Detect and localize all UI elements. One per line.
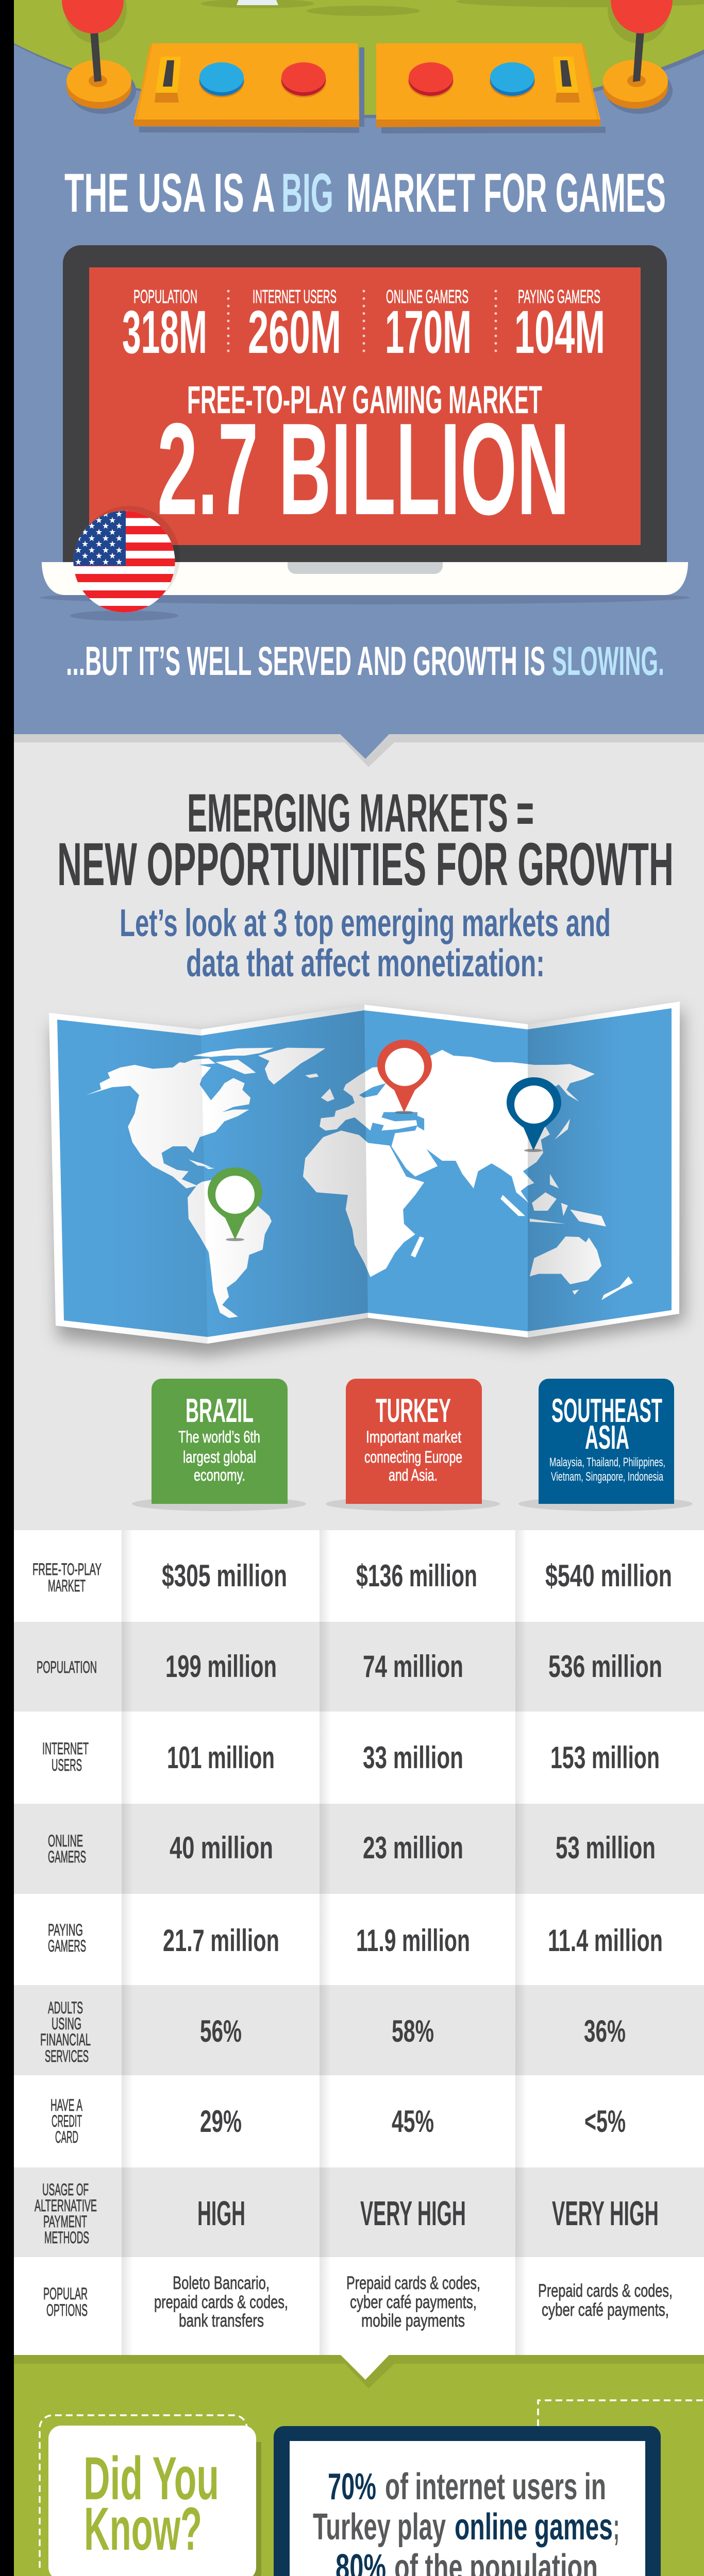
card: Turkey: Important market bbox=[366, 1428, 461, 1446]
icon: left button panel bbox=[134, 43, 364, 133]
row: popular options: bank transfers bbox=[179, 2311, 264, 2331]
illustration: desktop monitor with Turkey fact bbox=[274, 2426, 661, 2576]
row: paying gamers: 21.7 million bbox=[163, 1923, 279, 1958]
row: have a credit card: CREDIT bbox=[52, 2112, 82, 2130]
row: usage of alternative payment methods: ALTERNATIVE bbox=[35, 2196, 97, 2215]
row: usage of alternative payment methods: PAYMENT bbox=[43, 2212, 87, 2231]
row: popular options: Prepaid cards & codes, bbox=[346, 2273, 480, 2293]
illustration: arcade console bbox=[0, 0, 704, 133]
card: Brazil: BRAZIL bbox=[186, 1392, 254, 1429]
row: adults using financial services: USING bbox=[52, 2014, 81, 2033]
row: online gamers bbox=[48, 1831, 656, 1866]
card: Turkey bbox=[326, 1379, 500, 1511]
row: popular options: POPULAR bbox=[43, 2284, 88, 2303]
row: free-to-play market: MARKET bbox=[48, 1577, 86, 1595]
row: paying gamers bbox=[48, 1921, 663, 1958]
row: adults using financial services: 56% bbox=[200, 2014, 242, 2048]
row: paying gamers: PAYING bbox=[48, 1921, 83, 1939]
stat: online gamers: 170M bbox=[385, 298, 472, 366]
row: internet users: INTERNET bbox=[42, 1739, 89, 1758]
panel: comparison table bbox=[14, 1530, 704, 2355]
callout: did you know speech bubble bbox=[48, 2426, 261, 2576]
card: Southeast Asia bbox=[518, 1379, 693, 1511]
subheading: three markets bbox=[120, 901, 611, 985]
row: popular options: Boleto Bancario, bbox=[173, 2273, 270, 2293]
fact text: Turkey online games bbox=[313, 2466, 619, 2576]
row: internet users: 33 million bbox=[363, 1740, 463, 1775]
heading: USA is a big market bbox=[64, 162, 666, 224]
callout: did you know speech bubble: Did You bbox=[83, 2445, 219, 2513]
stat: paying gamers: PAYING GAMERS bbox=[518, 286, 600, 307]
row: adults using financial services: 36% bbox=[584, 2014, 626, 2048]
row: adults using financial services bbox=[40, 1998, 626, 2065]
row: online gamers: 23 million bbox=[363, 1831, 463, 1865]
row: have a credit card: 29% bbox=[200, 2104, 242, 2139]
row: free-to-play market: $136 million bbox=[356, 1558, 477, 1593]
row: adults using financial services: SERVICES bbox=[45, 2047, 89, 2065]
row: popular options bbox=[43, 2273, 673, 2331]
panel: emerging markets bbox=[14, 734, 704, 1530]
row: population: 536 million bbox=[548, 1649, 662, 1684]
row: paying gamers: 11.9 million bbox=[356, 1923, 470, 1958]
row: popular options: cyber café payments, bbox=[350, 2292, 477, 2312]
icon: Turkey map pin bbox=[377, 1040, 432, 1114]
row: adults using financial services: FINANCIAL bbox=[40, 2030, 91, 2049]
row: usage of alternative payment methods: METHODS bbox=[44, 2228, 89, 2247]
row: have a credit card: 45% bbox=[392, 2104, 434, 2139]
row: internet users bbox=[42, 1739, 660, 1775]
card: Brazil: The world’s 6th bbox=[178, 1428, 260, 1446]
continents bbox=[86, 1048, 633, 1318]
stat: population bbox=[122, 286, 207, 366]
stat: internet users: INTERNET USERS bbox=[253, 286, 337, 307]
row: paying gamers: GAMERS bbox=[48, 1937, 86, 1955]
row: popular options: mobile payments bbox=[361, 2311, 465, 2331]
fact text: Turkey online games: 70% bbox=[328, 2466, 376, 2507]
illustration: laptop with market stats bbox=[40, 245, 690, 604]
row: population: POPULATION bbox=[37, 1658, 97, 1676]
row: online gamers: GAMERS bbox=[48, 1848, 86, 1866]
row: online gamers: 40 million bbox=[170, 1831, 273, 1865]
row: usage of alternative payment methods: HIGH bbox=[197, 2194, 245, 2233]
card: Brazil: economy. bbox=[194, 1466, 245, 1484]
row: free-to-play market: $305 million bbox=[162, 1558, 287, 1593]
icon: US flag badge bbox=[70, 506, 180, 621]
fact text: Turkey online games: ; bbox=[613, 2506, 619, 2548]
row: have a credit card: CARD bbox=[55, 2128, 78, 2146]
row: usage of alternative payment methods: VERY HIGH bbox=[360, 2194, 466, 2233]
row: online gamers: 53 million bbox=[556, 1831, 656, 1865]
icon: right button panel bbox=[376, 43, 606, 133]
panel: did you know bbox=[8, 2354, 704, 2576]
icon: Southeast Asia map pin bbox=[507, 1077, 561, 1152]
heading: USA is a big market: BIG bbox=[281, 162, 333, 224]
row: have a credit card bbox=[51, 2096, 626, 2146]
fact text: Turkey online games: Turkey play bbox=[313, 2506, 446, 2548]
left margin strip bbox=[0, 0, 14, 2576]
row: popular options: prepaid cards & codes, bbox=[154, 2292, 288, 2312]
row: population: 199 million bbox=[165, 1649, 277, 1684]
fact text: Turkey online games: online games bbox=[455, 2506, 613, 2548]
stat: online gamers: ONLINE GAMERS bbox=[386, 286, 468, 307]
stat: population: POPULATION bbox=[133, 286, 197, 307]
stat: internet users: 260M bbox=[248, 298, 341, 366]
row: population: 74 million bbox=[363, 1649, 463, 1684]
heading: emerging markets bbox=[57, 783, 674, 899]
stat: paying gamers: 104M bbox=[514, 298, 605, 366]
stat: internet users bbox=[248, 286, 341, 366]
stat: paying gamers bbox=[514, 286, 605, 366]
row: adults using financial services: 58% bbox=[392, 2014, 434, 2048]
row: usage of alternative payment methods: USAGE OF bbox=[42, 2180, 89, 2199]
illustration: folded world map bbox=[49, 1002, 684, 1356]
row: popular options: OPTIONS bbox=[46, 2301, 88, 2319]
row: internet users: 101 million bbox=[167, 1740, 275, 1775]
row: adults using financial services: ADULTS bbox=[48, 1998, 83, 2017]
row: usage of alternative payment methods bbox=[35, 2180, 659, 2247]
card: Brazil: largest global bbox=[183, 1448, 256, 1466]
stat: population: 318M bbox=[122, 298, 207, 366]
card: Brazil bbox=[132, 1379, 306, 1511]
row: internet users: USERS bbox=[52, 1756, 82, 1774]
row: online gamers: ONLINE bbox=[48, 1832, 83, 1850]
row: have a credit card: HAVE A bbox=[51, 2096, 82, 2114]
card: Turkey: and Asia. bbox=[389, 1466, 438, 1484]
icon: left joystick bbox=[62, 0, 136, 114]
card: Turkey: TURKEY bbox=[376, 1392, 451, 1429]
icon: Brazil map pin bbox=[208, 1167, 262, 1241]
callout: did you know speech bubble: Know? bbox=[84, 2495, 202, 2563]
row: free-to-play market: FREE-TO-PLAY bbox=[32, 1560, 102, 1579]
stat: online gamers bbox=[385, 286, 472, 366]
heading: USA is a big market: THE USA IS A bbox=[64, 162, 275, 224]
card: Southeast Asia: ASIA bbox=[585, 1418, 629, 1456]
row: population bbox=[37, 1649, 662, 1684]
panel: USA market bbox=[0, 0, 704, 734]
row: free-to-play market bbox=[32, 1558, 672, 1595]
row: have a credit card: <5% bbox=[584, 2104, 626, 2139]
card: Turkey: connecting Europe bbox=[364, 1448, 462, 1466]
icon: right joystick bbox=[603, 0, 673, 114]
